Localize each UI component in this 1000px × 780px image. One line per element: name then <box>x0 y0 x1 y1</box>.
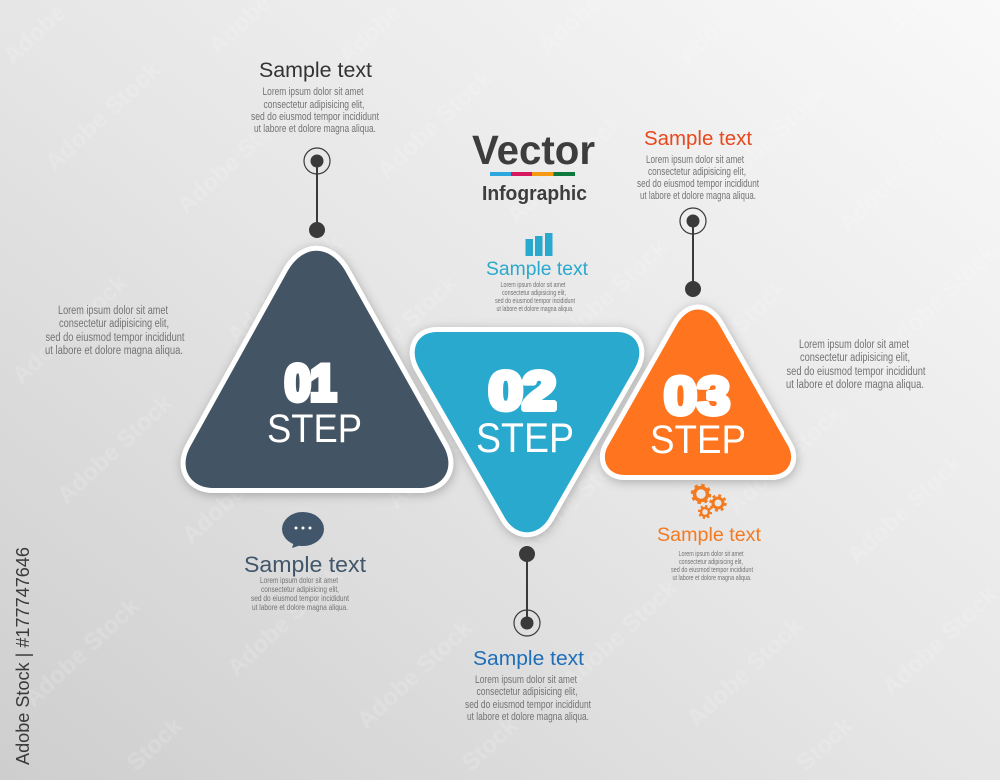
text block: lower right <box>657 525 762 582</box>
text block: centre: consectetur adipisicing elit, <box>502 288 566 297</box>
text: Adobe Stock <box>172 99 298 219</box>
text block: lower left: Sample text <box>244 552 366 577</box>
text block: lower left: sed do eiusmod tempor incididunt <box>251 593 349 603</box>
text block: right: Lorem ipsum dolor sit amet <box>799 339 910 351</box>
text: Stock <box>792 712 858 777</box>
text: Adobe Stock <box>877 239 1000 359</box>
text block: lower left: Lorem ipsum dolor sit amet <box>260 575 338 585</box>
triangle panel: step 02 <box>415 332 639 532</box>
connector: step 02 <box>514 546 540 636</box>
connector: step 03 <box>680 208 706 297</box>
text block: top left <box>251 59 379 135</box>
number 01: 01 <box>285 355 336 411</box>
number 03: 03 <box>664 367 730 426</box>
text block: right <box>786 339 926 391</box>
icon: bar chart <box>526 233 552 256</box>
text: Adobe Stock <box>19 592 145 712</box>
triangle panel: step 01 <box>186 251 448 488</box>
icon: speech bubble <box>282 512 324 548</box>
text: Adobe Stock <box>667 274 793 394</box>
text block: top right: Sample text <box>644 128 752 150</box>
text: Adobe Stock <box>877 581 1000 701</box>
text: Stock <box>122 712 188 777</box>
text block: lower right: consectetur adipisicing elit, <box>679 557 743 566</box>
title block <box>472 127 595 205</box>
text block: bottom: consectetur adipisicing elit, <box>476 686 578 698</box>
icon: gears <box>692 485 726 518</box>
text: Adobe Stock <box>512 439 638 559</box>
text block: lower left: consectetur adipisicing elit, <box>261 584 339 594</box>
text block: centre: ut labore et dolore magna aliqua. <box>496 304 574 313</box>
text: Adobe Stock <box>352 614 478 734</box>
text block: lower left: ut labore et dolore magna aliqua. <box>252 602 348 612</box>
text: Adobe Stock <box>52 389 178 509</box>
text block: top right: ut labore et dolore magna aliqua. <box>640 190 756 202</box>
text block: bottom: ut labore et dolore magna aliqua. <box>467 711 589 723</box>
text: Adobe <box>673 0 746 70</box>
text: Adobe Stock <box>382 394 508 514</box>
text block: top right <box>637 128 759 202</box>
text: Adobe Stock <box>557 574 683 694</box>
number 02: 02 <box>489 362 556 421</box>
subtitle: Infographic: Infographic <box>482 183 587 205</box>
text block: lower right: Sample text <box>657 525 762 546</box>
text: Adobe Stock <box>707 79 833 199</box>
text block: lower right: Lorem ipsum dolor sit amet <box>678 549 744 558</box>
text: Adobe Stock <box>682 612 808 732</box>
text block: top left: consectetur adipisicing elit, <box>264 99 364 111</box>
text block: bottom: Lorem ipsum dolor sit amet <box>475 674 577 686</box>
text: Adobe <box>333 0 406 70</box>
text: Adobe Stock <box>177 429 303 549</box>
step label 01: STEP <box>267 407 362 451</box>
step label 02: STEP <box>476 414 574 461</box>
text block: lower left <box>244 552 366 612</box>
text block: top left: sed do eiusmod tempor incididunt <box>251 111 379 123</box>
text block: lower right: sed do eiusmod tempor incididunt <box>671 565 754 574</box>
text block: top left: Sample text <box>259 59 372 82</box>
text: Adobe Stock <box>7 269 133 389</box>
text block: bottom: sed do eiusmod tempor incididunt <box>465 699 591 711</box>
text block: centre: Lorem ipsum dolor sit amet <box>500 280 566 289</box>
text block: centre <box>486 259 589 313</box>
text: Adobe Stock <box>40 56 166 176</box>
text: Adobe Stock <box>722 399 848 519</box>
text block: right: sed do eiusmod tempor incididunt <box>786 366 926 378</box>
text block: left: consectetur adipisicing elit, <box>59 318 169 330</box>
text: Adobe Stock <box>222 229 348 349</box>
text block: top left: ut labore et dolore magna aliqua. <box>254 123 376 135</box>
title: Vector: Vector <box>472 127 595 173</box>
text block: top right: Lorem ipsum dolor sit amet <box>646 154 744 166</box>
text block: lower right: ut labore et dolore magna aliqua. <box>672 573 752 582</box>
text block: centre: sed do eiusmod tempor incididunt <box>495 296 576 305</box>
text block: right: consectetur adipisicing elit, <box>800 352 910 364</box>
text: Adobe Stock <box>222 561 348 681</box>
text: Adobe Stock <box>842 449 968 569</box>
text block: top right: consectetur adipisicing elit, <box>648 166 746 178</box>
text: Adobe Stock <box>337 269 463 389</box>
text block: left: sed do eiusmod tempor incididunt <box>46 332 185 344</box>
triangle panel: step 03 <box>605 310 791 475</box>
text block: bottom <box>465 648 591 723</box>
text: Adobe Stock <box>833 117 959 237</box>
text: Adobe Stock <box>372 64 498 184</box>
connector: step 01 <box>304 148 330 238</box>
step label 03: STEP <box>650 418 746 462</box>
text block: left: Lorem ipsum dolor sit amet <box>58 305 169 317</box>
text: Stock <box>457 712 523 777</box>
text block: top left: Lorem ipsum dolor sit amet <box>262 86 364 98</box>
stock id label: Adobe Stock | #177747646 <box>13 547 33 765</box>
colour bar <box>490 172 575 176</box>
text: Adobe Stock <box>502 109 628 229</box>
text block: left: ut labore et dolore magna aliqua. <box>45 345 183 357</box>
text: Adobe Stock <box>547 234 673 354</box>
text block: left <box>45 305 185 357</box>
text block: top right: sed do eiusmod tempor incididunt <box>637 178 759 190</box>
text block: right: ut labore et dolore magna aliqua. <box>786 379 924 391</box>
text block: bottom: Sample text <box>473 648 584 670</box>
text block: centre: Sample text <box>486 259 589 280</box>
